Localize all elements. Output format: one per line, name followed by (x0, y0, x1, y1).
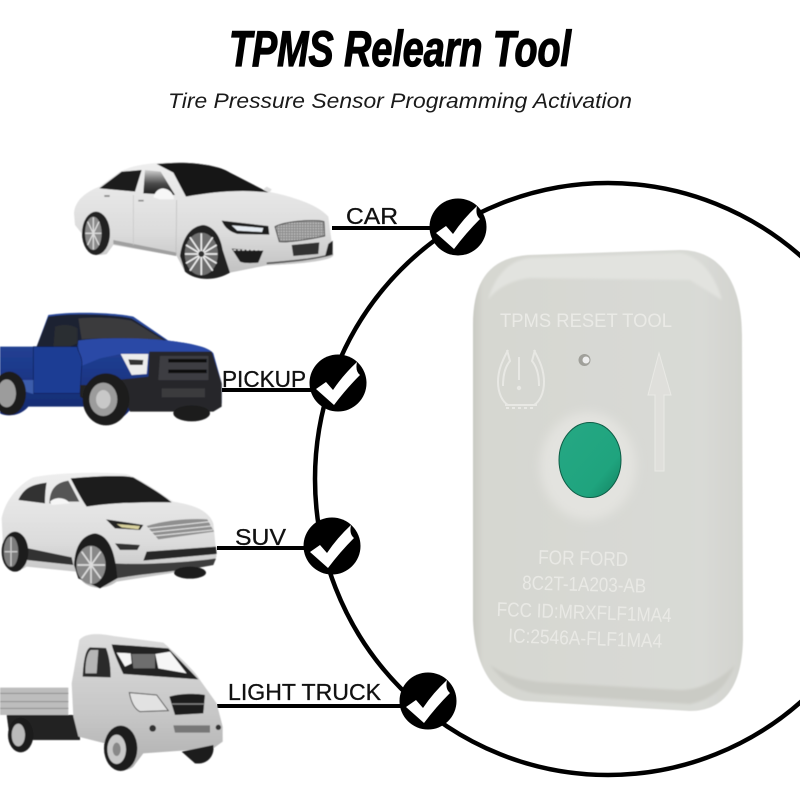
light truck illustration (0, 634, 223, 771)
green button (559, 422, 621, 498)
connector: light truck (217, 704, 407, 708)
icon: check badge pickup (310, 354, 366, 412)
connector: pickup (222, 388, 317, 392)
white car illustration (74, 163, 333, 279)
text: IC number: IC:2546A-FLF1MA4 (508, 625, 663, 653)
text: for ford: FOR FORD (538, 547, 628, 571)
device body (473, 250, 743, 711)
text: FCC ID: FCC ID:MRXFLF1MA4 (496, 599, 672, 627)
icon: up arrow (648, 353, 671, 471)
icon: TPMS warning symbol (498, 350, 544, 408)
device: TPMS reset tool (473, 250, 743, 711)
device heading text: TPMS RESET TOOL (500, 311, 672, 332)
subtitle: Tire Pressure Sensor Programming Activation (168, 89, 632, 113)
LED hole (578, 354, 590, 366)
device info text (496, 547, 672, 653)
device bottom shading (490, 665, 735, 704)
connector: car (332, 226, 436, 230)
text: part number: 8C2T-1A203-AB (522, 572, 646, 598)
label: CAR: CAR (346, 203, 398, 229)
button recess (540, 412, 636, 520)
connector: SUV (217, 546, 309, 550)
label: SUV: SUV (235, 524, 287, 550)
label: LIGHT TRUCK: LIGHT TRUCK (228, 679, 382, 705)
title: TPMS Relearn Tool (229, 21, 572, 77)
silver SUV illustration (2, 473, 217, 588)
large connecting circle (315, 183, 800, 775)
device top bevel (488, 253, 722, 300)
blue pickup illustration (0, 313, 222, 425)
label: PICKUP: PICKUP (222, 366, 306, 392)
icon: check badge SUV (304, 518, 360, 574)
icon: check badge car (430, 198, 486, 256)
icon: check badge light truck (400, 672, 456, 730)
